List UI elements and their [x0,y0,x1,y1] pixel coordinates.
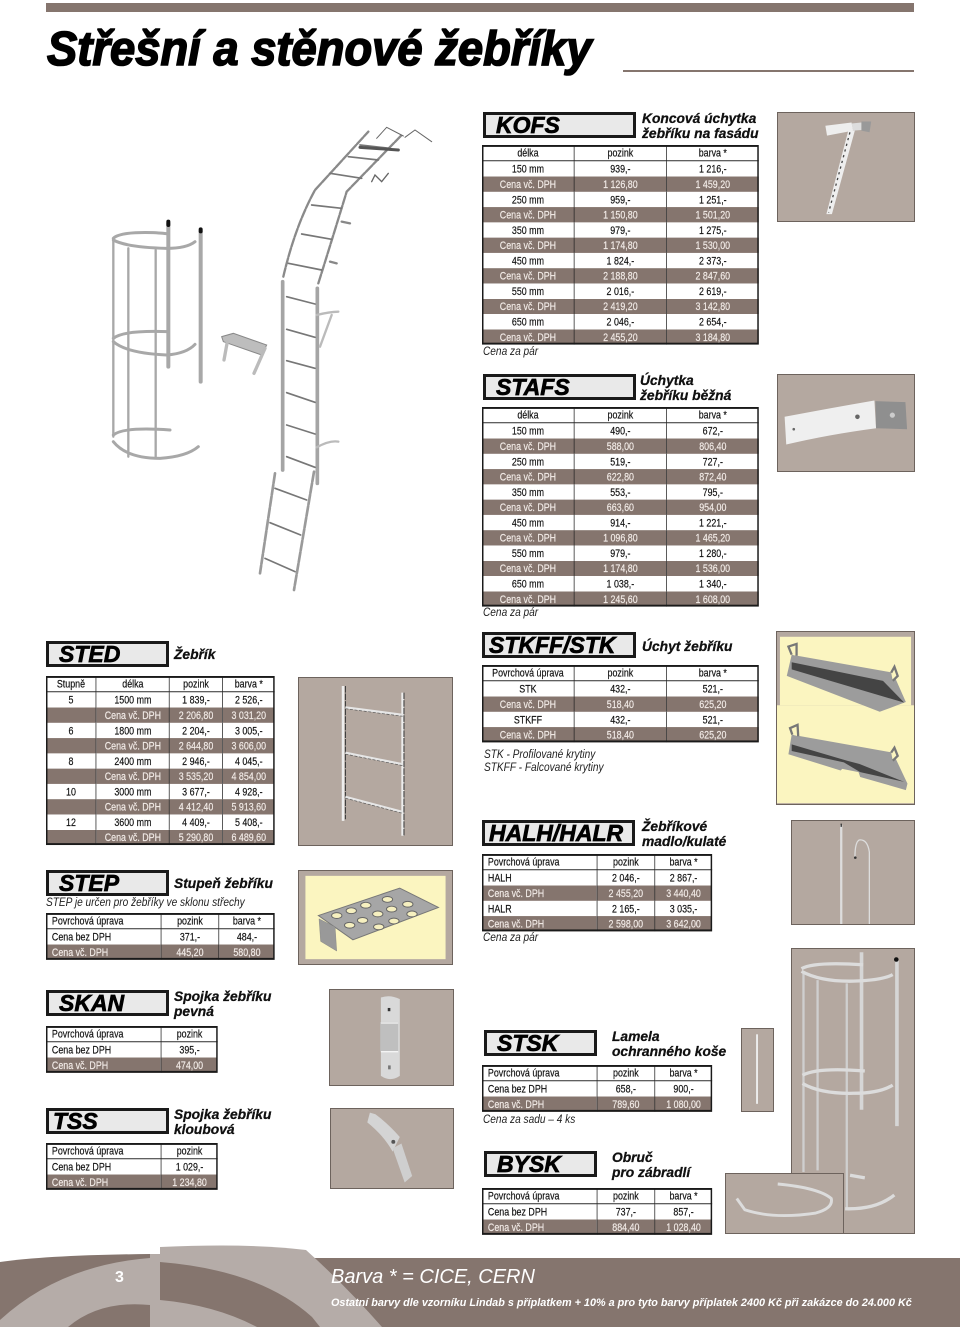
table: KOFS: 1 501,20 [696,208,730,221]
heading: STSK: ochranného koše [612,1044,726,1059]
table: KOFS: 1 126,80 [603,177,638,191]
table: STAFS: 622,80 [607,470,634,483]
table: STAFS: 1 174,80 [603,562,638,575]
photo: STED ladder [298,677,453,846]
photo: TSS connector [330,1108,454,1189]
table: STSK: 789,60 [612,1097,639,1111]
table: HALH: 3 440,40 [666,886,701,900]
table: STAFS: barva * [699,408,727,421]
table: STAFS: 954,00 [699,501,726,514]
illustration: ladder assembly [112,126,432,592]
table: STED: 6 489,60 [231,831,266,844]
heading: KOFS: žebříku na fasádu [642,126,759,141]
photo: KOFS bracket [777,112,915,222]
table: STED: Cena vč. DPH [105,831,161,844]
table: BYSK: 857,- [673,1205,694,1219]
table: KOFS: 2 654,- [699,315,727,328]
table: STED: 8 [68,754,73,768]
table: STAFS: 1 038,- [607,577,634,590]
table: STAFS: délka [517,408,539,421]
table: STAFS: 1 245,60 [603,592,638,606]
table: KOFS: 2 016,- [607,284,634,298]
footer band [0,1246,960,1327]
table: STED: 5 913,60 [231,800,266,814]
heading: KOFS: Koncová úchytka [642,111,756,126]
code box: STED: STED [59,641,120,667]
table: STAFS: pozink [608,408,633,421]
table: KOFS: 2 619,- [699,284,727,298]
table: STSK: pozink [613,1066,639,1079]
heading: SKAN [174,989,272,1020]
table: STEP: 445,20 [176,945,204,959]
table: TSS: 1 029,- [176,1160,203,1174]
photo: cage panel [791,948,915,1234]
table: STED: 3600 mm [114,815,151,829]
table: KOFS: 1 150,80 [603,208,638,221]
photo: hoop panel [725,1173,844,1234]
table: SKAN [46,1026,218,1073]
table: TSS: Cena bez DPH [52,1160,111,1174]
heading: STSK [612,1029,726,1059]
table: STKFF: 521,- [703,713,723,726]
table: STSK: Povrchová úprava [488,1066,560,1079]
cage [113,222,201,458]
table: STAFS [482,407,759,607]
table: KOFS: pozink [608,146,633,159]
table: BYSK [482,1188,712,1235]
table: STKFF [482,665,759,742]
code box: SKAN [46,990,169,1016]
table: KOFS: 939,- [610,162,630,176]
table: STKFF: 432,- [610,713,630,726]
note: STSK: Cena za sadu – 4 ks [483,1114,575,1126]
table: STAFS: 914,- [610,516,630,529]
table: KOFS: 450 mm [512,254,544,267]
note: STEP: STEP je určen pro žebříky ve sklonu střechy [46,897,245,909]
table: STAFS: 150 mm [512,424,544,438]
table: STKFF: STKFF [514,713,542,726]
photo: STAFS bracket [777,374,915,472]
table: STED: Stupně [57,677,85,690]
table: KOFS: délka [517,146,539,159]
code box: STAFS [483,374,636,400]
table: STED: 3 606,00 [231,739,266,752]
heading: TSS: kloubová [174,1122,235,1137]
table: STAFS: 490,- [610,424,630,438]
table: STED: Cena vč. DPH [105,708,161,722]
note: HALH: Cena za pár [483,932,538,944]
table: STED: 2 206,80 [179,708,213,722]
note: KOFS: Cena za pár [483,346,538,358]
table: STED: 4 412,40 [179,800,213,814]
table: KOFS: 1 824,- [607,254,634,267]
table: STED: 5 408,- [235,815,263,829]
table: KOFS: 150 mm [512,162,544,176]
code box: BYSK [484,1151,597,1177]
table: STED: 1500 mm [114,693,151,707]
table: STAFS: Cena vč. DPH [500,531,556,545]
table: STKFF: Cena vč. DPH [500,728,556,741]
photo: HALH handrail [791,820,915,925]
heading: STEP: Stupeň žebříku [174,876,273,891]
table: STED: 4 928,- [235,785,263,798]
table: STED: 4 409,- [182,815,210,829]
table: STED: 3 031,20 [231,708,266,722]
step [222,333,267,373]
table: KOFS: 2 046,- [607,315,634,328]
table: BYSK: barva * [669,1189,698,1202]
table: SKAN: 395,- [179,1043,200,1057]
table: STAFS: 727,- [703,455,723,468]
table: STAFS: Cena vč. DPH [500,470,556,483]
table: STED: 2 526,- [235,693,263,707]
heading: STAFS: Úchytka [640,373,694,388]
table: STKFF: Povrchová úprava [492,666,564,679]
table: KOFS: 2 373,- [699,254,727,267]
table: BYSK: 737,- [616,1205,636,1219]
heading: HALH: Žebříkové [642,819,707,834]
table: HALH: Cena vč. DPH [488,886,544,900]
table: SKAN: Povrchová úprava [52,1027,124,1040]
table: STEP: Cena vč. DPH [52,945,108,959]
footer note: Ostatní barvy dle vzorníku Lindab s příplatkem + 10% a pro tyto barvy příplatek 2400 Kč při zakázce do 24.000 Kč [331,1297,912,1309]
table: STED: 3 677,- [182,785,210,798]
heading: STAFS: žebříku běžná [640,388,731,403]
table: STAFS: 979,- [610,546,630,560]
table: STAFS: 588,00 [607,439,634,453]
table: STSK: 658,- [616,1082,636,1096]
table: STAFS: 650 mm [512,577,544,590]
table: STKFF: 521,- [703,682,723,696]
table: BYSK: Cena bez DPH [488,1205,547,1219]
table: TSS: 1 234,80 [172,1175,207,1189]
table: STAFS: 872,40 [699,470,726,483]
table: SKAN: Cena vč. DPH [52,1058,108,1072]
table: STEP: pozink [177,914,203,927]
table: KOFS: Cena vč. DPH [500,208,556,221]
table: STED: 2 204,- [182,724,210,737]
table: STED: 3000 mm [114,785,151,798]
table: STSK: Cena bez DPH [488,1082,547,1096]
heading: STKFF: Úchyt žebříku [642,639,732,654]
photo: STEP tread [298,870,453,965]
table: TSS: pozink [177,1144,202,1157]
table: KOFS: Cena vč. DPH [500,239,556,252]
table: STED: 4 045,- [235,754,263,768]
table: STKFF: Cena vč. DPH [500,697,556,711]
table: KOFS: 1 216,- [699,162,727,176]
table: HALH: 3 642,00 [666,917,701,930]
table: KOFS: Cena vč. DPH [500,330,556,344]
photo: SKAN connector [329,989,454,1086]
table: STED: 5 [68,693,73,707]
table: STKFF: pozink [608,666,633,679]
table: STSK: barva * [669,1066,698,1079]
table: STEP: 484,- [237,930,257,944]
table: KOFS: 979,- [610,223,630,237]
photo: STKFF brackets [776,631,915,805]
note: STK roofing types [484,749,604,774]
code box: TSS: TSS [53,1108,98,1134]
table: BYSK: Povrchová úprava [488,1189,560,1202]
table: KOFS: Cena vč. DPH [500,177,556,191]
table: STED: barva * [235,677,263,690]
heading: STED: Žebřík [174,647,215,662]
table: HALH: Cena vč. DPH [488,917,544,930]
table: STED: 1 839,- [182,693,210,707]
table: KOFS: 1 459,20 [696,177,730,191]
table: STED: pozink [183,677,209,690]
table: KOFS: 1 530,00 [696,239,730,252]
table: HALH: 2 455,20 [609,886,643,900]
page number: 3 [115,1269,124,1286]
heading: SKAN: pevná [174,1004,214,1019]
table: KOFS: 2 455,20 [603,330,638,344]
table: STAFS: 550 mm [512,546,544,560]
table: KOFS: 350 mm [512,223,544,237]
table: STAFS: 250 mm [512,455,544,468]
table: BYSK: 884,40 [612,1220,639,1234]
code box: TSS [46,1108,169,1134]
table: HALH: 2 165,- [612,902,640,915]
table: KOFS: 2 188,80 [603,269,638,283]
table: STED: 3 535,20 [179,770,213,783]
table: SKAN: Cena bez DPH [52,1043,111,1057]
heading: BYSK: pro zábradlí [612,1165,690,1180]
code box: STED [46,641,169,667]
table: HALH: HALH [488,871,512,885]
table: STED: 2400 mm [114,754,151,768]
table: STAFS: 350 mm [512,485,544,499]
table: TSS: Povrchová úprava [52,1144,124,1157]
table: HALH: pozink [613,855,639,868]
code box: STEP: STEP [59,870,119,896]
table: STED: 1800 mm [114,724,151,737]
table: STAFS: 1 465,20 [696,531,730,545]
table: STED: 6 [68,724,73,737]
heading: STSK: Lamela [612,1029,660,1044]
code box: KOFS: KOFS [496,112,560,138]
table: STAFS: 450 mm [512,516,544,529]
table: HALH: barva * [669,855,698,868]
table: STAFS: 1 608,00 [696,592,730,606]
table: STED: 2 644,80 [179,739,213,752]
heading: HALH [642,818,726,849]
table: KOFS: Cena vč. DPH [500,269,556,283]
code box: SKAN: SKAN [59,990,124,1016]
table: STAFS: 1 536,00 [696,562,730,575]
table: STSK: Cena vč. DPH [488,1097,544,1111]
code box: STSK: STSK [497,1030,558,1056]
note: STK roofing types: STK - Profilované krytiny [484,749,595,761]
code box: KOFS [483,112,636,138]
table: STEP: Cena bez DPH [52,930,111,944]
table: STAFS: Cena vč. DPH [500,501,556,514]
code box: HALH/HALR: HALH/HALR [489,820,623,846]
note: STAFS: Cena za pár [483,607,538,619]
table: SKAN: pozink [177,1027,202,1040]
table: STAFS: 1 221,- [699,516,727,529]
table: KOFS: 1 174,80 [603,239,638,252]
table: STAFS: Cena vč. DPH [500,439,556,453]
table: HALH [482,854,712,931]
table: STAFS: 672,- [703,424,723,438]
table: TSS [46,1143,218,1190]
table: STAFS: 1 280,- [699,546,727,560]
table: STED: Cena vč. DPH [105,800,161,814]
table: SKAN: 474,00 [176,1058,203,1072]
title: Střešní a stěnové žebříky [47,23,592,76]
code box: STEP [46,870,169,896]
heading: HALH: madlo/kulaté [642,834,726,849]
table: STSK: 900,- [673,1082,694,1096]
table: STAFS: Cena vč. DPH [500,592,556,606]
table: KOFS: 1 275,- [699,223,727,237]
table: STAFS: 806,40 [699,439,726,453]
table: KOFS: 2 419,20 [603,300,638,313]
table: STKFF: barva * [699,666,727,679]
heading: BYSK: Obruč [612,1150,653,1165]
table: STED: 2 946,- [182,754,210,768]
table: STED: délka [122,677,143,690]
footer heading: Barva * = CICE, CERN [331,1266,535,1288]
table: STKFF: 625,20 [699,697,726,711]
table: STAFS: 1 340,- [699,577,727,590]
table: STEP [46,913,275,960]
table: HALH: 2 046,- [612,871,640,885]
table: BYSK: Cena vč. DPH [488,1220,544,1234]
table: STAFS: Cena vč. DPH [500,562,556,575]
code box: BYSK: BYSK [497,1151,561,1177]
table: STED: 3 005,- [235,724,263,737]
table: STED: 10 [66,785,76,798]
lower ladder section [260,472,314,590]
photo: lamela panel [741,1028,774,1112]
table: HALH: 2 598,00 [609,917,643,930]
table: KOFS: 650 mm [512,315,544,328]
table: STED: Cena vč. DPH [105,770,161,783]
title rule [623,70,914,72]
table: BYSK: 1 028,40 [666,1220,701,1234]
table: STAFS: 795,- [703,485,723,499]
table: STEP: Povrchová úprava [52,914,124,927]
table: HALH: 2 867,- [670,871,697,885]
code box: STAFS: STAFS [496,374,570,400]
table: HALH: 3 035,- [670,902,697,915]
table: STED: 5 290,80 [179,831,213,844]
table: STAFS: 663,60 [607,501,634,514]
table: STKFF: 625,20 [699,728,726,741]
table: STED [46,676,275,845]
table: KOFS: 550 mm [512,284,544,298]
heading: STAFS [640,372,731,403]
table: KOFS: 250 mm [512,193,544,206]
table: STKFF: 518,40 [607,697,634,711]
table: KOFS: barva * [699,146,727,159]
table: HALH: HALR [488,902,512,915]
table: STKFF: 432,- [610,682,630,696]
table: HALH: Povrchová úprava [488,855,560,868]
table: BYSK: pozink [613,1189,639,1202]
table: KOFS: 1 251,- [699,193,727,206]
table: TSS: Cena vč. DPH [52,1175,108,1189]
top bar [46,3,914,12]
table: STSK: 1 080,00 [666,1097,701,1111]
table: STAFS: 553,- [610,485,630,499]
main ladder [283,282,338,483]
table: KOFS: 3 184,80 [696,330,730,344]
table: STAFS: 1 096,80 [603,531,638,545]
table: STED: 12 [66,815,76,829]
code box: STSK [484,1030,597,1056]
table: STED: 4 854,00 [231,770,266,783]
heading: TSS: Spojka žebříku [174,1107,271,1122]
table: KOFS [482,145,759,345]
heading: BYSK [612,1150,692,1180]
table: STED: Cena vč. DPH [105,739,161,752]
table: STAFS: 519,- [610,455,630,468]
table: KOFS: 2 847,60 [696,269,730,283]
table: STEP: 371,- [180,930,200,944]
table: KOFS: 3 142,80 [696,300,730,313]
table: STKFF: STK [519,682,537,696]
table: STEP: 580,80 [233,945,261,959]
table: STKFF: 518,40 [607,728,634,741]
upper ladder section [283,127,432,283]
heading: TSS [174,1107,272,1137]
table: KOFS: Cena vč. DPH [500,300,556,313]
note: STK roofing types: STKFF - Falcované krytiny [484,762,604,774]
table: STSK [482,1065,712,1112]
heading: KOFS [642,111,759,141]
table: STEP: barva * [233,914,261,927]
table: KOFS: 959,- [610,193,630,206]
heading: SKAN: Spojka žebříku [174,989,271,1004]
code box: STKFF/STK: STKFF/STK [489,632,616,658]
